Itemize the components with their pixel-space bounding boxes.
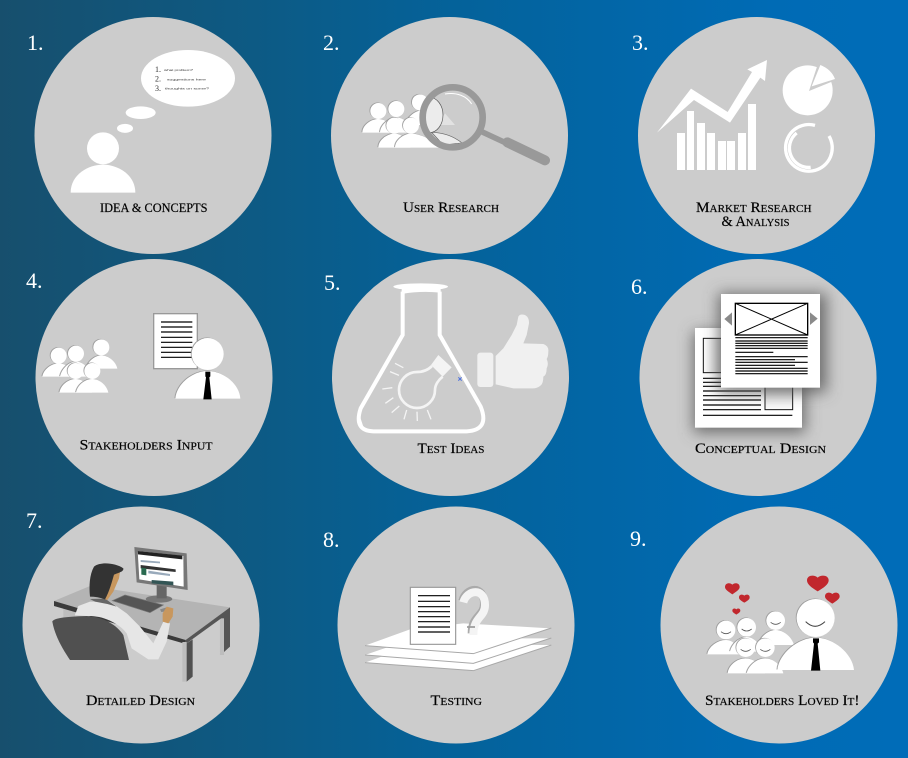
icon: flask with light bulb bbox=[358, 283, 483, 433]
thought list: suggestions here bbox=[167, 78, 207, 82]
icon: designer at desk bbox=[52, 547, 230, 682]
circle 4 bbox=[36, 259, 272, 496]
panel: step 9 stakeholders loved it bbox=[630, 506, 898, 744]
label 5: Test Ideas bbox=[418, 441, 484, 457]
label 3 bbox=[696, 200, 812, 230]
number 8: 8. bbox=[323, 527, 340, 552]
icon: happy lead stakeholder with tie bbox=[777, 599, 854, 671]
label 4: Stakeholders Input bbox=[80, 438, 213, 454]
panel: step 4 stakeholders input bbox=[26, 259, 272, 496]
icon: back wireframe page bbox=[693, 328, 805, 433]
circle 5 bbox=[332, 259, 569, 496]
icon: happy stakeholder group bbox=[707, 611, 794, 673]
number 4: 4. bbox=[26, 268, 42, 293]
number 2: 2. bbox=[323, 30, 340, 55]
icon: pie chart bbox=[783, 62, 840, 115]
thought list: 1. bbox=[155, 65, 161, 74]
panel: step 7 detailed design bbox=[22, 506, 260, 744]
panel: step 8 testing bbox=[323, 506, 574, 744]
panel: step 2 user research bbox=[323, 17, 568, 254]
icon: front wireframe page bbox=[718, 293, 827, 393]
thought list: what problem? bbox=[164, 68, 193, 72]
icon: bar chart with rising arrow bbox=[657, 60, 767, 170]
icon: paper stack with document and question mark bbox=[365, 587, 551, 671]
number 3: 3. bbox=[632, 30, 648, 55]
circle 6 bbox=[640, 259, 876, 496]
number 5: 5. bbox=[324, 270, 340, 295]
circle 9 bbox=[660, 506, 898, 744]
label 6: Conceptual Design bbox=[695, 441, 826, 457]
number 9: 9. bbox=[630, 526, 646, 551]
panel: step 5 test ideas bbox=[324, 259, 569, 496]
thought list: 3. bbox=[155, 84, 161, 93]
icon: thumbs up bbox=[477, 314, 548, 388]
panel: step 6 conceptual design bbox=[631, 259, 876, 496]
icon: users and magnifying glass bbox=[362, 87, 545, 160]
label 8: Testing bbox=[430, 693, 482, 709]
thought list bbox=[155, 65, 210, 93]
icon: stakeholder group bbox=[42, 339, 117, 393]
number 1: 1. bbox=[27, 30, 44, 55]
icon: hearts bbox=[725, 576, 840, 615]
number 6: 6. bbox=[631, 274, 648, 299]
circle 7 bbox=[22, 506, 260, 744]
icon: document bbox=[154, 314, 197, 369]
label 9: Stakeholders Loved It! bbox=[705, 693, 860, 709]
icon: stakeholder with tie bbox=[175, 338, 240, 399]
number 7: 7. bbox=[26, 508, 42, 533]
circle 8 bbox=[338, 506, 574, 744]
panel: step 1 idea and concepts bbox=[27, 17, 272, 254]
circle 1 bbox=[34, 17, 272, 254]
circle 2 bbox=[331, 17, 568, 254]
label 2: User Research bbox=[403, 200, 499, 216]
circle 3 bbox=[638, 17, 875, 254]
icon: ring chart bbox=[786, 125, 832, 171]
icon: thinking person bbox=[71, 50, 235, 193]
panel: step 3 market research bbox=[632, 17, 875, 254]
label 7: Detailed Design bbox=[86, 693, 195, 709]
thought list: thoughts on some? bbox=[165, 86, 210, 90]
label 1: IDEA & CONCEPTS bbox=[100, 200, 208, 215]
label 3: & Analysis bbox=[722, 214, 790, 230]
thought list: 2. bbox=[155, 74, 161, 84]
label 3: Market Research bbox=[696, 200, 812, 216]
